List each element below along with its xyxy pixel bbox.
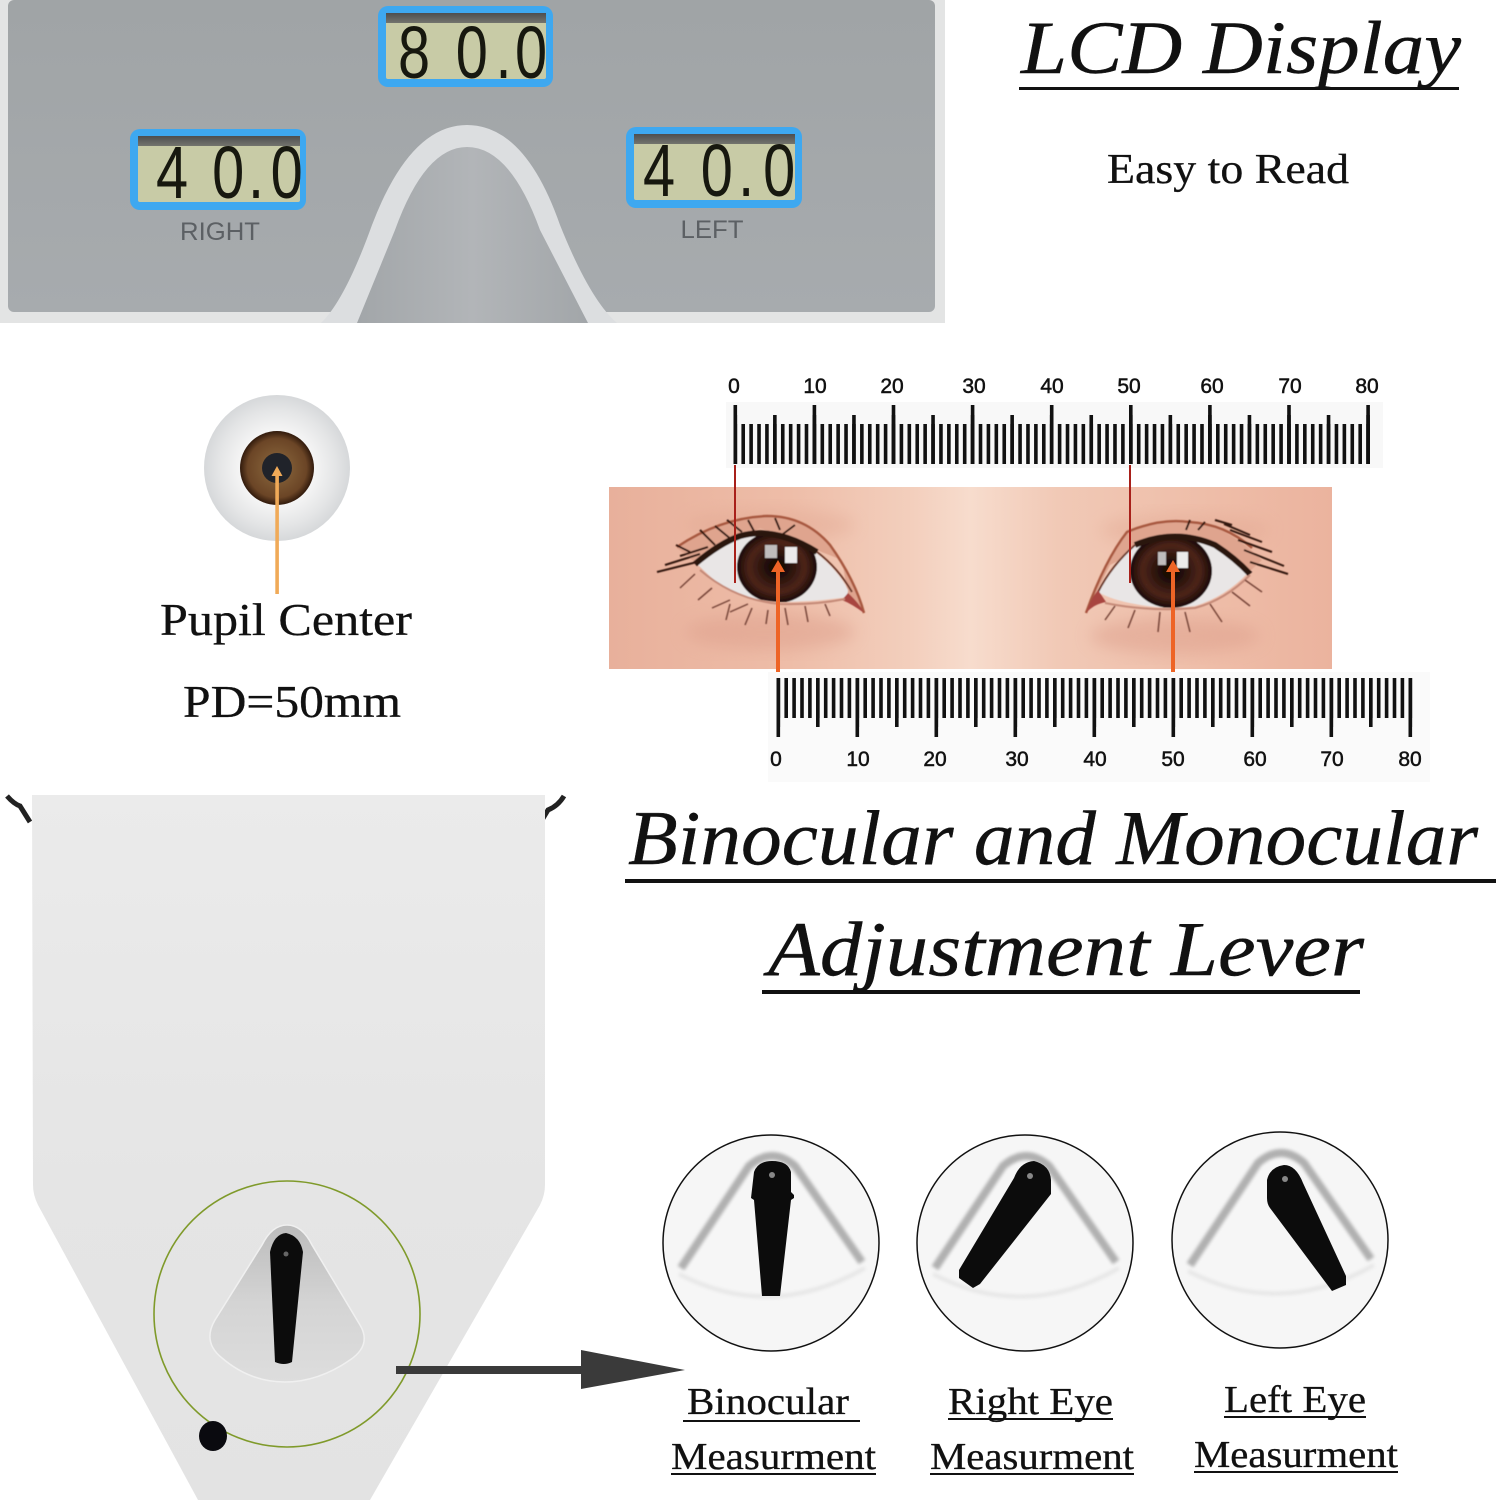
icon: binocular lever position (663, 1135, 879, 1351)
LCD: right eye reading: 0 (271, 132, 303, 215)
label: LEFT: LEFT (680, 216, 744, 244)
chart: top ruler: 10 (803, 375, 827, 398)
LCD: left eye reading: 4 (643, 130, 675, 213)
LCD: right eye reading (130, 129, 306, 215)
black button (199, 1421, 227, 1451)
text: PD=50mm: PD=50mm (183, 676, 401, 727)
LCD: total reading: 0 (515, 12, 547, 95)
label: Left Eye Measurment (1194, 1379, 1398, 1476)
label: Right Eye Measurment: Measurment (930, 1436, 1134, 1478)
chart: top ruler: 70 (1278, 375, 1302, 398)
chart: bottom ruler (768, 672, 1430, 782)
marker: red reference lines (734, 465, 1131, 583)
heading: Adjustment Lever: Adjustment Lever (762, 906, 1365, 992)
arrow: to lever details (396, 1350, 685, 1389)
arrow: right pupil pointer (1166, 560, 1180, 672)
chart: bottom ruler: 10 (846, 748, 870, 771)
recess (210, 1225, 364, 1382)
right eye (1086, 520, 1288, 632)
chart: bottom ruler: 20 (923, 748, 947, 771)
chart: bottom ruler: 0 (770, 748, 782, 771)
text: Pupil Center: Pupil Center (160, 594, 412, 645)
chart: top ruler: 30 (962, 375, 986, 398)
chart: top ruler: 80 (1355, 375, 1379, 398)
chart: bottom ruler: 60 (1243, 748, 1267, 771)
LCD: right eye reading: 0 (212, 132, 244, 215)
icon: right eye lever position (917, 1135, 1133, 1351)
LCD: total reading: 8 (398, 12, 430, 95)
LCD: left eye reading (626, 127, 802, 213)
chart: bottom ruler: 40 (1083, 748, 1107, 771)
pivot screw (284, 1252, 288, 1256)
heading: Binocular and Monocular: Binocular and Monocular (628, 795, 1479, 881)
panel: pupilometer body (7, 795, 564, 1500)
label: Binocular Measurment: Measurment (671, 1436, 876, 1478)
chart: bottom ruler: 50 (1161, 748, 1185, 771)
heading: LCD Display: LCD Display (1020, 7, 1462, 90)
label: Left Eye Measurment: Left Eye (1224, 1379, 1366, 1421)
label: Right Eye Measurment: Right Eye (948, 1381, 1113, 1423)
label: Right Eye Measurment (930, 1381, 1134, 1478)
LCD: total reading (378, 6, 553, 95)
LCD: left eye reading: 0 (763, 130, 795, 213)
chart: bottom ruler: 80 (1398, 748, 1422, 771)
chart: top ruler: 0 (728, 375, 740, 398)
label: RIGHT: RIGHT (180, 218, 260, 246)
left eye (657, 516, 864, 625)
chart: bottom ruler: 70 (1320, 748, 1344, 771)
chart: top ruler: 20 (880, 375, 904, 398)
label: Binocular Measurment (671, 1381, 876, 1478)
label: Binocular Measurment: Binocular (687, 1381, 849, 1423)
label: Left Eye Measurment: Measurment (1194, 1434, 1398, 1476)
icon: eyeball with pupil center pointer (204, 395, 350, 594)
LCD: left eye reading: 0 (701, 130, 733, 213)
icon: left eye lever position (1172, 1132, 1388, 1348)
lever (270, 1233, 303, 1364)
panel: LCD display device (0, 0, 945, 323)
chart: top ruler (726, 375, 1383, 468)
LCD: total reading: 0 (456, 12, 488, 95)
chart: top ruler: 60 (1200, 375, 1224, 398)
photo: face with both eyes (609, 487, 1332, 669)
LCD: left eye reading: . (738, 130, 754, 213)
LCD: right eye reading: . (248, 132, 264, 215)
highlight ellipse (154, 1181, 420, 1447)
text: Easy to Read: Easy to Read (1107, 147, 1349, 193)
chart: top ruler: 40 (1040, 375, 1064, 398)
chart: bottom ruler: 30 (1005, 748, 1029, 771)
LCD: total reading: . (495, 12, 512, 95)
arrow: left pupil pointer (771, 560, 785, 672)
LCD: right eye reading: 4 (156, 132, 188, 215)
chart: top ruler: 50 (1117, 375, 1141, 398)
